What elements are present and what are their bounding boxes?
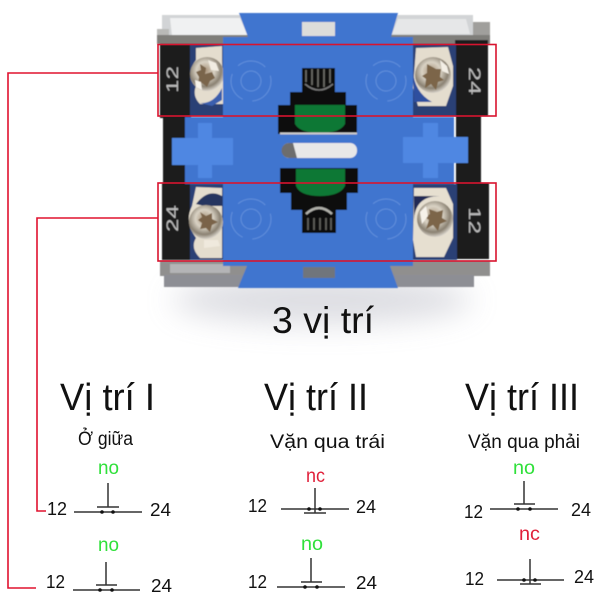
bottom clear cap [160,261,490,287]
terminal label 12 bottom right: 12 [465,207,484,234]
contact diagram: upper no: no [513,458,535,479]
contact diagram: upper no: 24 [150,500,171,520]
contact diagram: upper nc: 24 [356,497,376,517]
bottom grey notch [303,267,335,278]
terminal label 12 top left: 12 [163,66,182,93]
contact diagram: lower no [248,534,377,593]
contact diagram: lower no [46,535,172,596]
contact diagram: lower nc: nc [519,524,540,545]
black terminal blocks [160,40,489,260]
lower window with spring and green board [280,168,358,233]
contact diagram: lower nc: 24 [574,567,594,587]
white centre slot [282,143,357,158]
contact diagram: upper no: no [98,458,119,479]
blue central plate [223,13,413,288]
red highlight box: upper terminals [158,44,496,116]
switch shadow [172,276,472,324]
heading: position II: Vị trí II [264,377,368,419]
contact diagram: lower no: no [301,534,323,555]
red connector to lower row of position I [8,73,158,588]
heading: position III: Vị trí III [465,377,579,419]
contact diagram: lower nc [465,524,594,589]
left blue tab [172,123,233,178]
upper window with spring and green board [278,68,357,134]
terminal label 24 bottom left: 24 [163,205,182,232]
contact diagram: upper no: 24 [571,500,591,520]
column: position I [46,377,172,596]
right blue tab [403,123,468,178]
column: position II [248,377,385,593]
contact diagram: upper no: 12 [464,502,483,522]
red connector to upper row of position I [37,218,158,511]
column: position III [464,377,594,589]
contact diagram: upper no: 12 [47,499,67,519]
heading: position I: Vị trí I [60,377,155,419]
caption: turn right: Vặn qua phải [468,432,580,453]
contact diagram: upper nc: 12 [248,496,267,516]
screw bottom left [189,187,223,258]
top white notch [302,22,335,36]
contact diagram: lower no: 24 [151,576,172,596]
plate mounting circles [231,61,406,239]
contact diagram: lower no: 12 [46,572,65,592]
heading: 3 positions: 3 vị trí [272,300,375,341]
top clear cap [157,15,490,44]
terminal dark backing [190,44,457,260]
contact diagram: lower no: 24 [356,573,377,593]
contact diagram: upper no [464,458,591,522]
red highlight box: lower terminals [158,183,496,261]
contact diagram: lower no: no [98,535,119,556]
contact diagram: upper no [47,458,171,520]
screw top left [190,46,224,106]
contact diagram: lower no: 12 [248,572,267,592]
blue middle band [185,117,454,184]
contact diagram: lower nc: 12 [465,569,484,589]
terminal label 24 top right: 24 [465,67,484,95]
caption: middle: Ở giữa [78,428,133,450]
photo: three-position switch [157,13,490,288]
screw bottom right [413,188,453,257]
screw top right [413,47,453,106]
contact diagram: upper nc [248,466,376,517]
caption: turn left: Vặn qua trái [270,432,385,453]
contact diagram: upper nc: nc [306,466,325,487]
